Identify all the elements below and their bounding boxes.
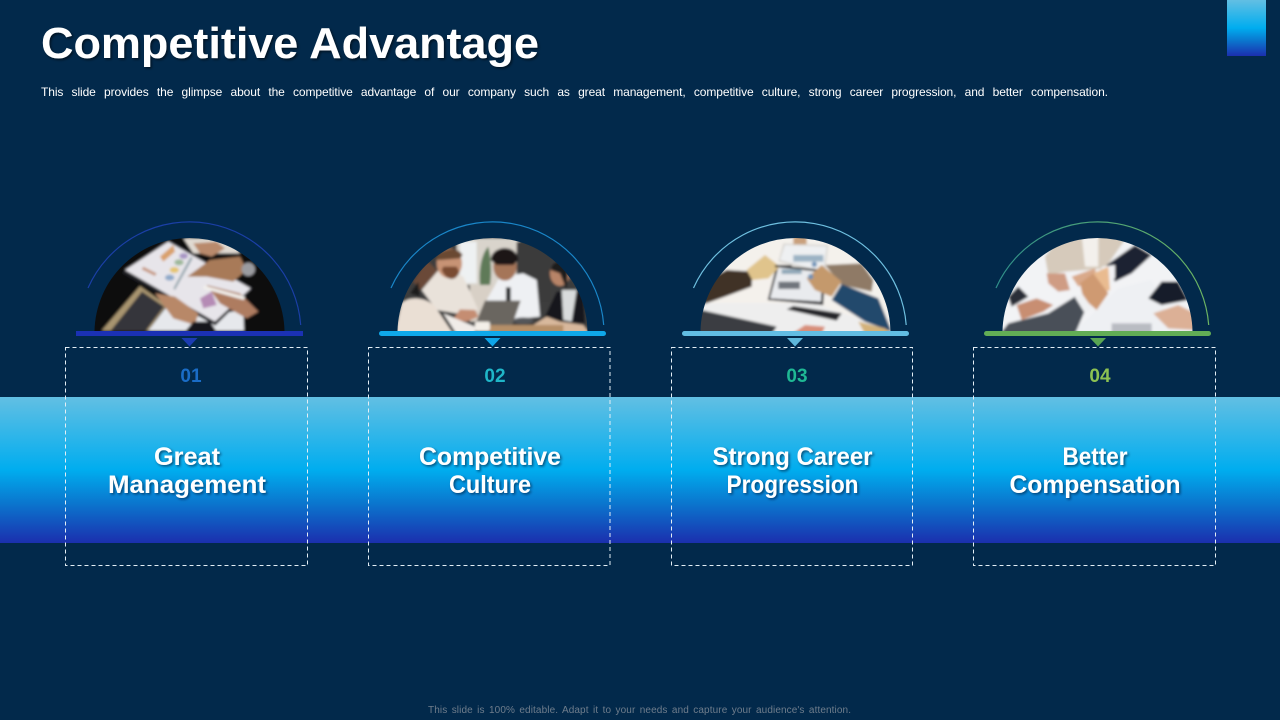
pointer triangle [182, 338, 198, 346]
dashed box [974, 348, 1216, 566]
arc [88, 222, 301, 325]
arc [391, 222, 604, 325]
footer note: This slide is 100% editable. Adapt it to your needs and capture your audience's attention. [428, 705, 851, 716]
label: Strong Career [712, 443, 873, 471]
photo: team around laptop [398, 238, 588, 331]
dashed box [672, 348, 912, 566]
panel: Great Management [66, 222, 308, 566]
label line 2: Compensation [1010, 471, 1180, 499]
label line 2: Culture [449, 471, 531, 499]
corner accent [1227, 0, 1266, 56]
label: Great [154, 443, 221, 471]
pointer triangle [1090, 338, 1106, 346]
dashed box [66, 348, 308, 566]
panel: Strong Career Progression [672, 222, 912, 566]
panel: Better Compensation [974, 222, 1216, 566]
number: 02 [484, 366, 506, 387]
number: 03 [786, 366, 808, 387]
gradient band [0, 397, 1280, 543]
base bar [76, 331, 303, 336]
number: 01 [180, 366, 202, 387]
photo: hands over charts and laptop [94, 238, 284, 331]
base bar [984, 331, 1211, 336]
base bar [379, 331, 606, 336]
photo: reviewing bar charts [700, 238, 890, 331]
number: 04 [1089, 366, 1111, 387]
photo: handshake over documents [1002, 238, 1192, 331]
label: Competitive [419, 443, 561, 471]
label line 2: Management [108, 471, 267, 499]
pointer triangle [484, 338, 500, 346]
label: Better [1062, 443, 1128, 471]
title: Competitive Advantage [41, 19, 539, 68]
dashed box [368, 348, 610, 566]
subtitle: This slide provides the glimpse about the competitive advantage of our company such as great management, competitive culture, strong career progression, and better compensation. [41, 85, 1108, 99]
arc [694, 222, 906, 325]
label line 2: Progression [726, 471, 858, 499]
pointer triangle [787, 338, 803, 346]
panel: Competitive Culture [368, 222, 610, 566]
base bar [682, 331, 909, 336]
arc [996, 222, 1209, 325]
